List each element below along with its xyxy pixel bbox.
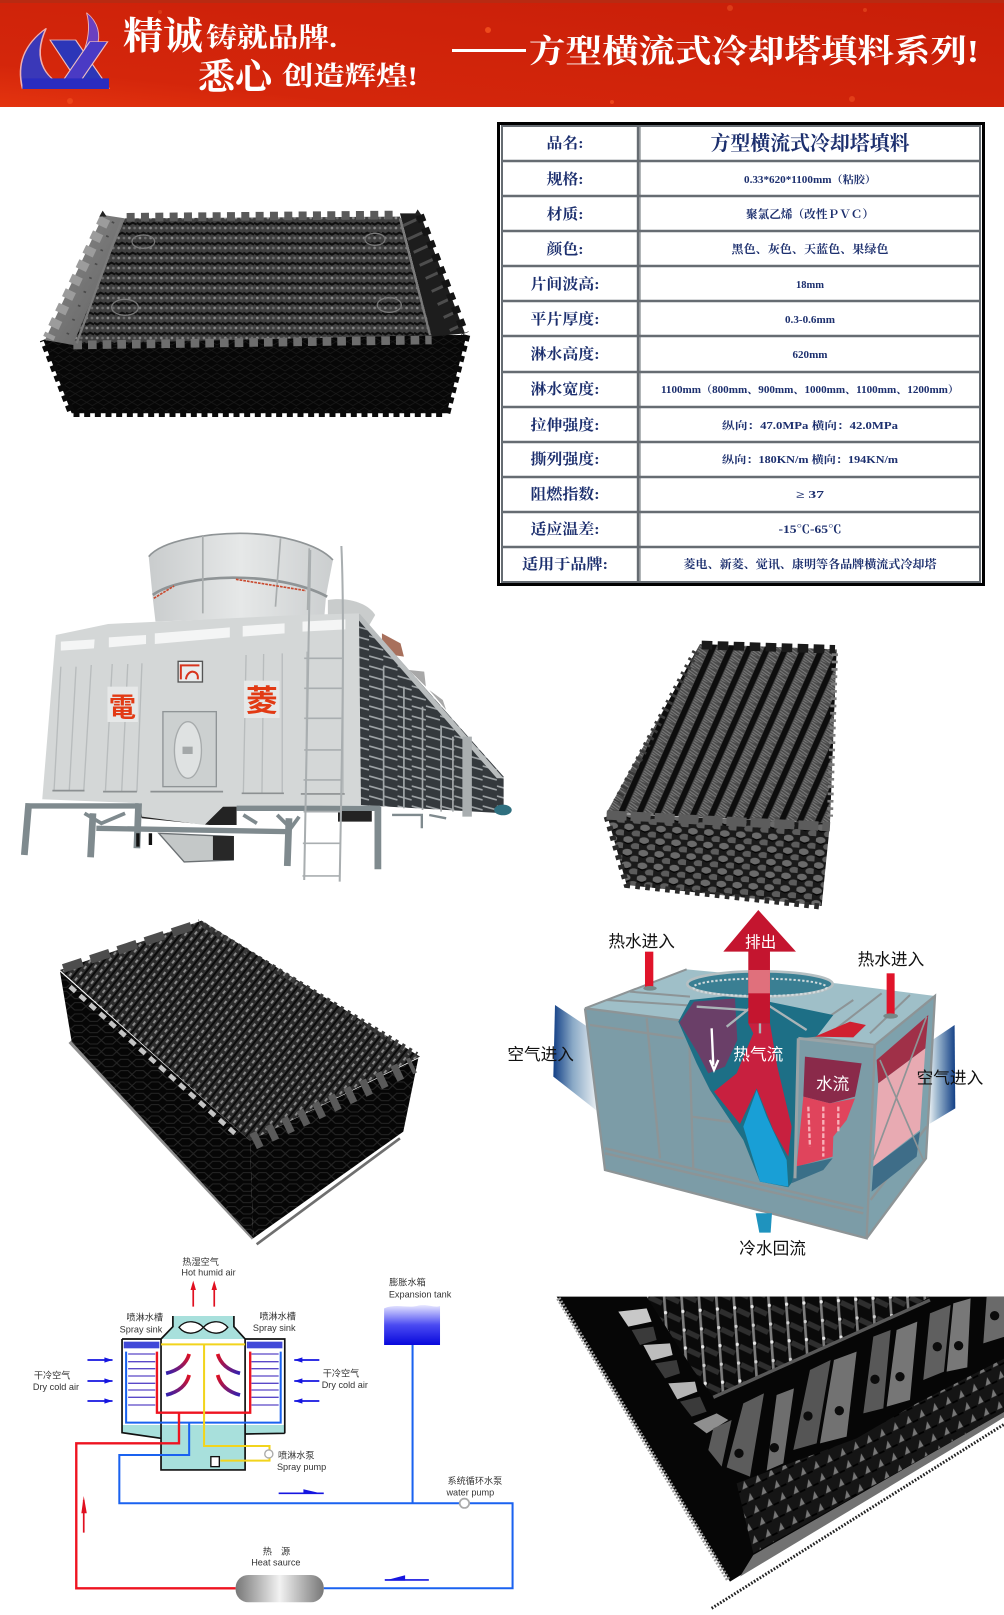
support frame	[24, 803, 446, 869]
photo: fill block on base	[60, 921, 420, 1244]
system labels: 干冷空气	[34, 1369, 70, 1380]
slogan line 2	[198, 57, 418, 97]
series title: 方型横流式冷却塔填料系列!	[529, 33, 979, 69]
row labels: 颜色:	[546, 240, 584, 258]
row labels: 材质:	[546, 205, 584, 223]
system labels: water pump	[445, 1488, 494, 1498]
row values: 0.3-0.6mm	[785, 315, 835, 326]
slogan line 1	[123, 16, 337, 58]
system labels: Hot humid air	[181, 1268, 236, 1278]
diagram: closed cooling water system	[33, 1256, 513, 1602]
diagram labels: 空气进入	[917, 1068, 984, 1087]
exhaust arrow: 排出	[745, 934, 776, 952]
photo: fill block end view	[607, 644, 837, 907]
system labels: 系统循环水泵	[447, 1475, 502, 1486]
air intakes	[553, 1005, 955, 1124]
row values: -15℃-65℃	[778, 524, 842, 536]
row values	[661, 131, 959, 571]
row labels: 适用于品牌:	[522, 555, 608, 573]
row labels: 淋水高度:	[530, 345, 600, 363]
row labels: 片间波高:	[530, 275, 600, 293]
system labels: 热 源	[263, 1545, 290, 1556]
diagram labels: 热水进入	[608, 932, 675, 951]
row labels	[522, 134, 608, 573]
gray fin panels	[708, 1297, 1004, 1477]
cold water outlet	[756, 1213, 772, 1233]
tower casing	[585, 969, 935, 1238]
row values: 620mm	[792, 350, 828, 361]
row values: 1100mm（800mm、900mm、1000mm、1100mm、1200mm）	[661, 384, 959, 396]
system labels: 热湿空气	[182, 1256, 219, 1267]
row values: 0.33*620*1100mm（粘胶）	[744, 173, 876, 186]
slogan line 2: 悉心	[198, 57, 277, 97]
row labels: 规格:	[546, 170, 584, 188]
row values: ≥ 37	[796, 490, 824, 501]
diagram labels: 热气流	[733, 1045, 784, 1064]
ladder	[303, 546, 343, 882]
photo: cooling tower	[24, 533, 512, 882]
water pump	[460, 1499, 469, 1508]
underside shadow	[135, 807, 372, 825]
row labels: 撕列强度:	[530, 450, 600, 468]
photo: fill block corner closeup	[557, 1297, 1004, 1608]
row labels: 拉伸强度:	[530, 416, 600, 434]
brand characters: 電	[109, 693, 136, 723]
row values: 18mm	[796, 280, 824, 291]
photo: fill block front view	[43, 209, 467, 413]
system labels: 喷淋水泵	[278, 1449, 315, 1460]
fan ring	[687, 971, 833, 1033]
row labels: 阻燃指数:	[530, 485, 600, 503]
row values: 聚氯乙烯（改性ＰＶＣ）	[746, 207, 874, 221]
front casing	[42, 613, 361, 825]
curved air arrows	[166, 1354, 240, 1395]
fill sheets	[128, 1354, 279, 1405]
system labels: 膨胀水箱	[389, 1277, 426, 1288]
row labels: 平片厚度:	[530, 310, 600, 328]
system labels: 喷淋水槽	[259, 1310, 296, 1321]
row values: 纵向：47.0MPa 横向：42.0MPa	[722, 419, 899, 432]
side louvers	[353, 614, 512, 817]
row values: 黑色、灰色、天蓝色、果绿色	[732, 242, 889, 256]
system labels: Dry cold air	[33, 1382, 79, 1392]
tower body	[122, 1316, 285, 1470]
diagram labels: 空气进入	[507, 1045, 574, 1064]
system labels: Spray sink	[253, 1323, 296, 1333]
hopper	[159, 833, 234, 862]
side edge blocks	[618, 1308, 728, 1433]
system labels: Expansion tank	[389, 1289, 452, 1299]
system labels: 喷淋水槽	[126, 1312, 163, 1323]
row values: 方型横流式冷却塔填料	[710, 131, 910, 155]
system labels: Spray sink	[120, 1324, 163, 1334]
row labels: 品名:	[546, 134, 584, 152]
system labels: Heat saurce	[251, 1558, 300, 1568]
blue water loop	[119, 1345, 513, 1588]
diagram labels	[507, 932, 984, 1258]
system labels	[33, 1256, 502, 1568]
system labels: 干冷空气	[323, 1368, 359, 1379]
diagram labels: 冷水回流	[739, 1239, 806, 1258]
slogan line 2: 创造辉煌!	[282, 61, 418, 91]
red water loop	[76, 1352, 250, 1588]
row labels: 适应温差:	[530, 520, 600, 538]
front casing: 菱	[246, 684, 278, 719]
cutaway interior	[678, 995, 928, 1192]
diagram labels: 水流	[816, 1074, 850, 1093]
slogan line 1: 精诚	[123, 16, 203, 58]
top honeycomb surface	[647, 1297, 930, 1397]
header banner	[0, 0, 1004, 107]
row values: 纵向：180KN/m 横向：194KN/m	[722, 453, 898, 466]
row values: 菱电、新菱、觉讯、康明等各品牌横流式冷却塔	[684, 557, 937, 571]
exhaust arrow	[723, 910, 796, 1023]
airflow arrows	[81, 1281, 429, 1581]
fan stack	[149, 533, 446, 710]
expansion tank	[384, 1305, 440, 1345]
row labels: 淋水宽度:	[530, 380, 600, 398]
diagram: crossflow tower cutaway	[507, 910, 984, 1258]
diagram labels: 热水进入	[858, 950, 925, 969]
system labels: Spray pump	[277, 1462, 326, 1472]
lower hatch face	[737, 1358, 1004, 1553]
system labels: Dry cold air	[322, 1380, 368, 1390]
heat source	[236, 1575, 324, 1602]
slogan line 1: 铸就品牌.	[206, 23, 337, 53]
icon: company logo	[20, 13, 109, 89]
spray water loop	[161, 1344, 270, 1461]
hot water pipes	[643, 952, 898, 1019]
table: product specifications	[498, 124, 984, 584]
spray pump	[211, 1450, 273, 1467]
